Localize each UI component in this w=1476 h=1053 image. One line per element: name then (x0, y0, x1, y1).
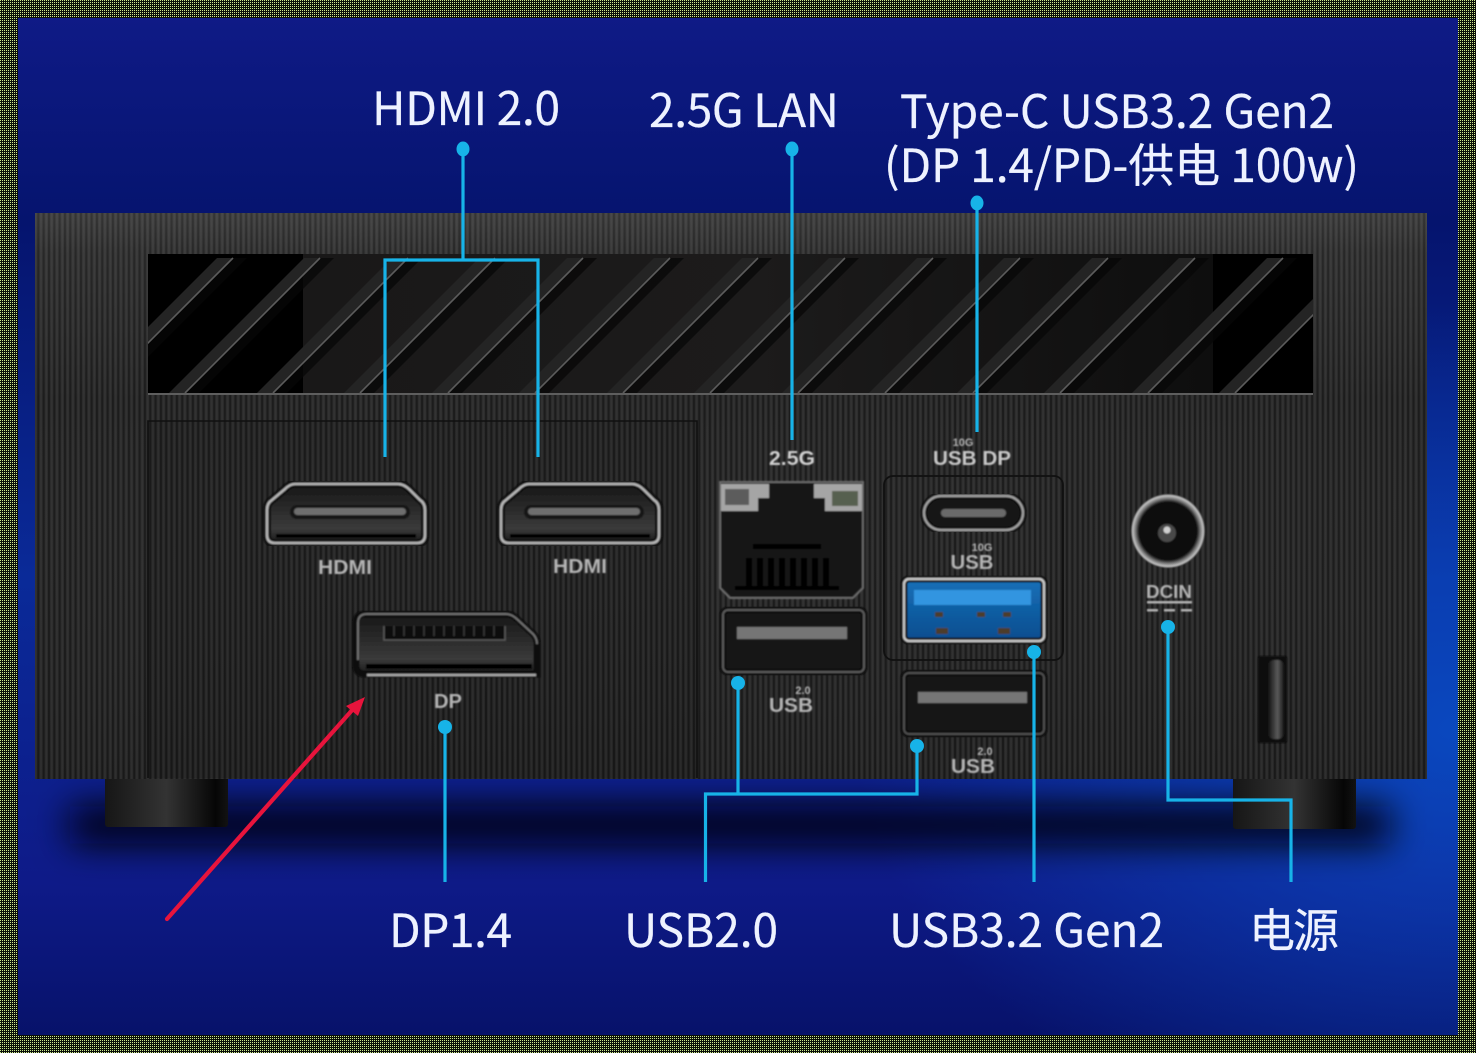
ground shadow (70, 806, 1390, 844)
small silkscreen labels: USB (769, 695, 813, 717)
small silkscreen labels: 2.0 (977, 746, 993, 758)
kensington lock (1258, 656, 1287, 743)
label: Type-C (884, 76, 1359, 196)
vent slats (82, 258, 1370, 393)
connector: USB 3.2 (1027, 645, 1041, 882)
vent lower lip (148, 393, 1313, 395)
label: USB3.2 Gen2: USB3.2 Gen2 (889, 895, 1164, 961)
port: Type-C (924, 496, 1023, 530)
port: HDMI right (501, 484, 659, 543)
port: DC jack (1131, 494, 1205, 568)
vent (148, 254, 1313, 393)
label: 2.5G LAN: 2.5G LAN (649, 75, 839, 141)
small silkscreen labels: HDMI (318, 557, 372, 579)
small silkscreen labels: USB DP (933, 448, 1011, 470)
small silkscreen labels: HDMI (553, 556, 607, 578)
panel: USB-C group (884, 476, 1063, 660)
port: HDMI left (267, 484, 425, 543)
right foot (1233, 775, 1356, 829)
small silkscreen labels: 10G (972, 542, 992, 554)
port: RJ45 LAN (720, 482, 863, 598)
small silkscreen labels: 10G (953, 437, 973, 449)
label: USB2.0: USB2.0 (624, 895, 778, 961)
small silkscreen labels: 2.0 (795, 685, 811, 697)
port: USB 2.0 right (904, 673, 1044, 734)
connector: Type-C (970, 196, 984, 432)
label: DP1.4: DP1.4 (389, 895, 512, 961)
small silkscreen labels: USB (950, 552, 994, 574)
port: USB 3.2 blue (904, 579, 1044, 641)
small silkscreen labels: DP (434, 691, 462, 713)
connector: DP (438, 720, 452, 882)
label: power: 电源 (1249, 895, 1339, 961)
small silkscreen labels: USB (951, 756, 995, 778)
arrow: red pointer to DP (167, 697, 365, 919)
label: HDMI 2.0: HDMI 2.0 (372, 73, 560, 139)
port: DisplayPort (356, 614, 537, 675)
left foot (105, 775, 228, 827)
connector: HDMI (385, 142, 538, 457)
label: Type-C: Type-C USB3.2 Gen2 (900, 76, 1334, 142)
small silkscreen labels: 2.5G (769, 448, 815, 470)
panel: HDMI and DP plate (148, 421, 697, 778)
small silkscreen labels (318, 437, 1192, 778)
port: USB 2.0 left (723, 610, 864, 672)
connector: LAN (786, 142, 798, 440)
connector: power (1161, 620, 1291, 882)
small silkscreen labels: DCIN (1146, 582, 1192, 602)
device body (35, 213, 1427, 779)
connector: USB 2.0 (706, 676, 924, 882)
label: Type-C: (DP 1.4/PD-供电 100w) (884, 130, 1359, 196)
